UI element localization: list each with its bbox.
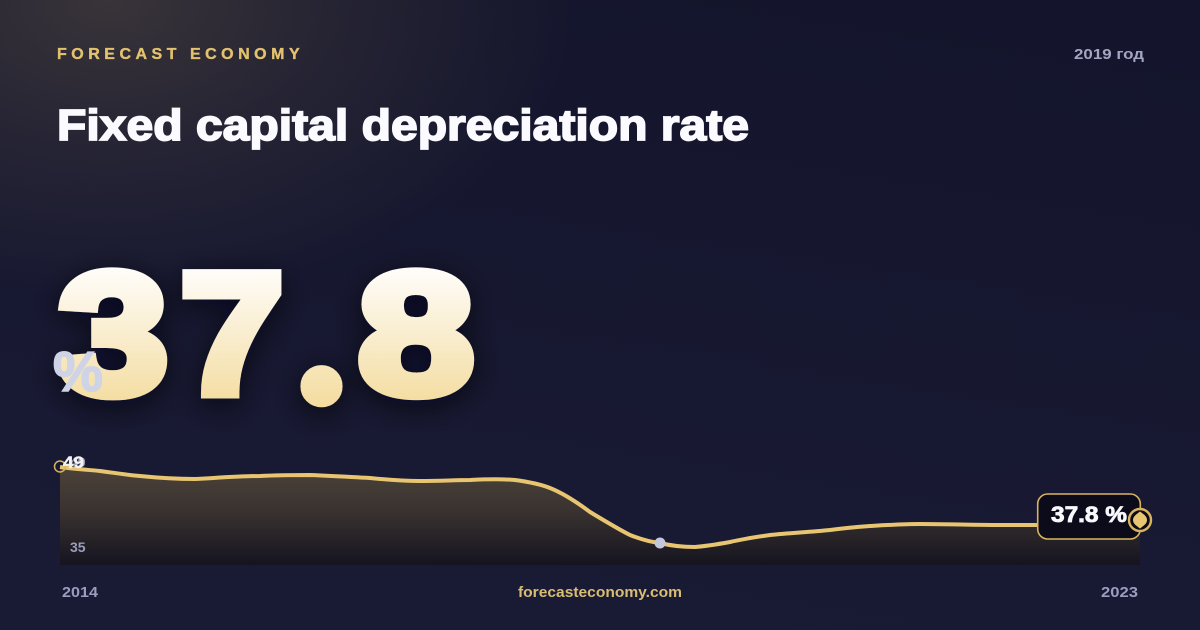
- chart: sparkline 2014 to 2023: [54, 453, 1151, 565]
- big value: 7: [180, 237, 284, 430]
- start year label: 2014: [62, 584, 99, 601]
- value badge: [1038, 494, 1140, 539]
- value badge: 37.8 %: [1051, 502, 1127, 527]
- year label: 2019 год: [1074, 46, 1145, 63]
- big value: 3: [58, 238, 168, 430]
- big value: 8: [358, 238, 474, 430]
- chart line: [60, 467, 1040, 547]
- big value: [58, 173, 474, 461]
- axis maximum label: 49: [70, 454, 86, 470]
- start point marker: [54, 461, 66, 472]
- axis minimum label: 35: [70, 539, 86, 555]
- minimum point marker: [654, 538, 666, 548]
- chart area fill: [60, 467, 1140, 565]
- start value label: 49: [63, 453, 84, 472]
- eyebrow: brand name: FORECAST ECONOMY: [57, 46, 304, 63]
- end year label: 2023: [1101, 584, 1138, 601]
- end point marker: [1129, 509, 1151, 531]
- website label: forecasteconomy.com: [518, 584, 682, 601]
- big value: .: [289, 173, 354, 461]
- percent unit: %: [53, 340, 103, 404]
- title: Fixed capital depreciation rate: [57, 101, 749, 150]
